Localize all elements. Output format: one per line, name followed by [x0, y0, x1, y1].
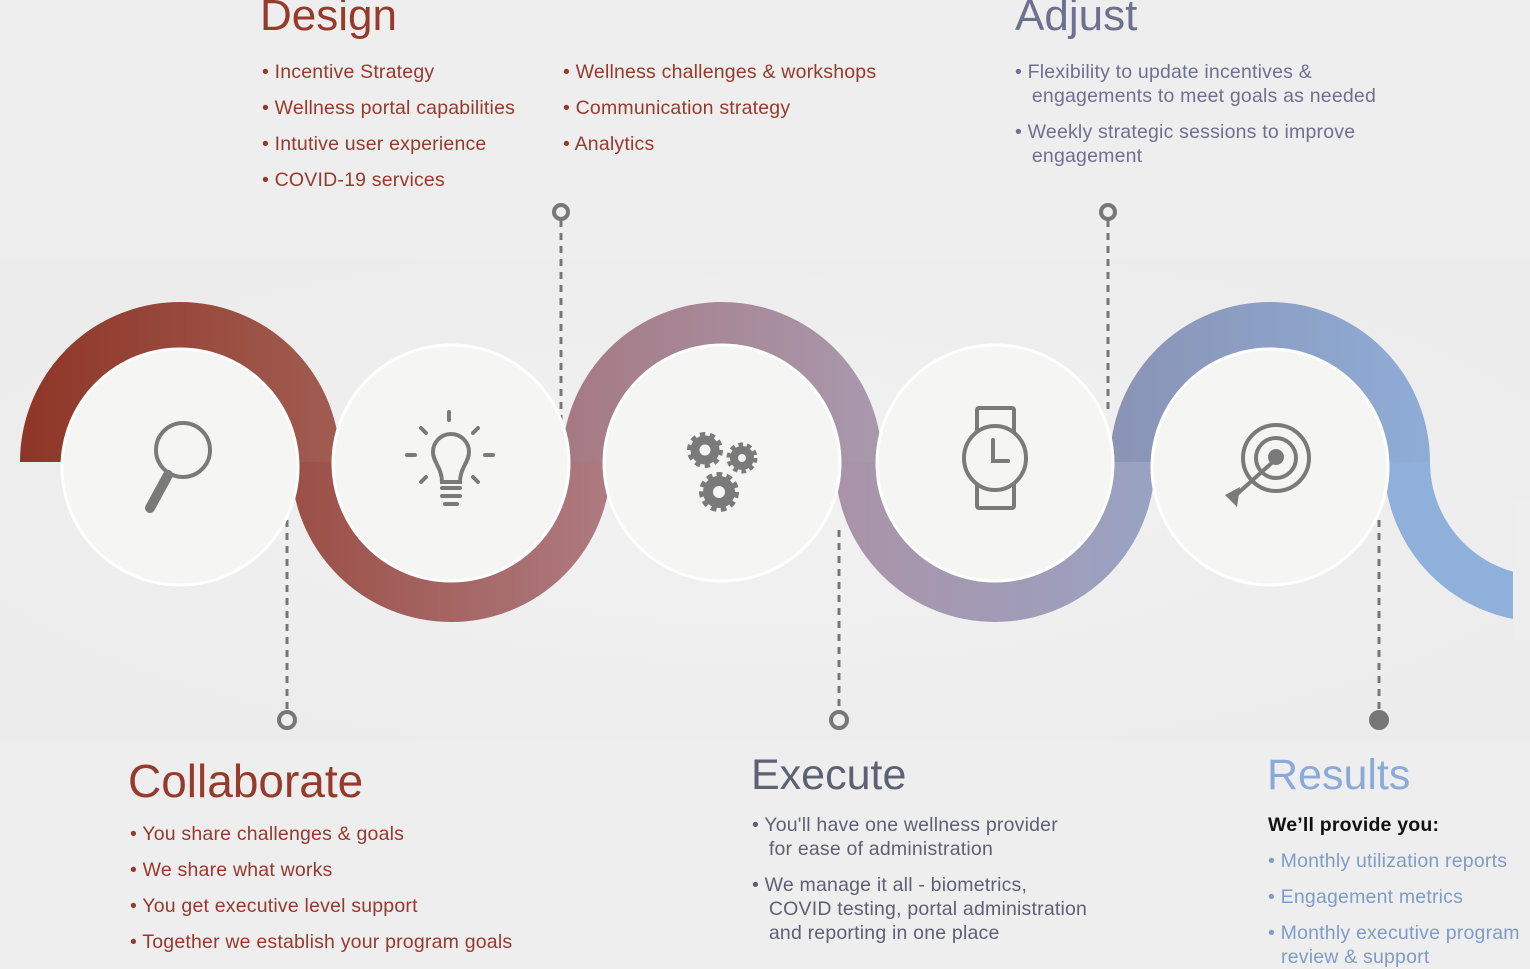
- text: and reporting in one place: [769, 922, 1000, 944]
- list: Execute: • You'll have one wellness provider: [752, 814, 1058, 836]
- text: engagement: [1032, 145, 1142, 167]
- text: • Weekly strategic sessions to improve: [1015, 121, 1355, 143]
- icon: gears: [690, 435, 755, 509]
- list: Collaborate: • We share what works: [130, 859, 332, 881]
- list: Execute: for ease of administration: [769, 838, 993, 860]
- list: Results: [1268, 850, 1520, 944]
- list: Collaborate: • You share challenges & goals: [130, 823, 404, 845]
- list: Execute: [752, 814, 1058, 860]
- list: Adjust: • Flexibility to update incentives &: [1015, 61, 1312, 83]
- list: Design col 1: • Incentive Strategy: [262, 61, 434, 83]
- list: Design col 2: • Analytics: [563, 133, 654, 155]
- list: Results: • Engagement metrics: [1268, 886, 1463, 908]
- list: Design col 1: [262, 61, 515, 191]
- heading: Results: Results: [1267, 751, 1410, 799]
- list: Design col 1: • COVID-19 services: [262, 169, 445, 191]
- list: Adjust: engagements to meet goals as needed: [1032, 85, 1376, 107]
- list: Collaborate: • You get executive level support: [130, 895, 418, 917]
- ribbon arcs: [43, 325, 1530, 599]
- circles: [62, 345, 1388, 585]
- list: Collaborate: [130, 823, 512, 953]
- connectors: [287, 220, 1379, 712]
- list: Adjust: [1015, 61, 1376, 107]
- list: Design col 2: • Communication strategy: [563, 97, 790, 119]
- text: COVID testing, portal administration: [769, 898, 1087, 920]
- list: Design col 2: [563, 61, 876, 155]
- text: • We manage it all - biometrics,: [752, 874, 1027, 896]
- icons: [150, 408, 1309, 508]
- list: Results last line: review & support: [1281, 946, 1429, 968]
- list: Collaborate: • Together we establish your program goals: [130, 931, 512, 953]
- subheading: provide: We’ll provide you:: [1268, 814, 1439, 836]
- list: Results: • Monthly executive program: [1268, 922, 1520, 944]
- heading: Collaborate: Collaborate: [128, 755, 363, 807]
- heading: Execute: Execute: [751, 751, 906, 799]
- list: Design col 1: • Intutive user experience: [262, 133, 486, 155]
- list: Design col 2: • Wellness challenges & workshops: [563, 61, 876, 83]
- list: Design col 1: • Wellness portal capabilities: [262, 97, 515, 119]
- list: Results: • Monthly utilization reports: [1268, 850, 1507, 872]
